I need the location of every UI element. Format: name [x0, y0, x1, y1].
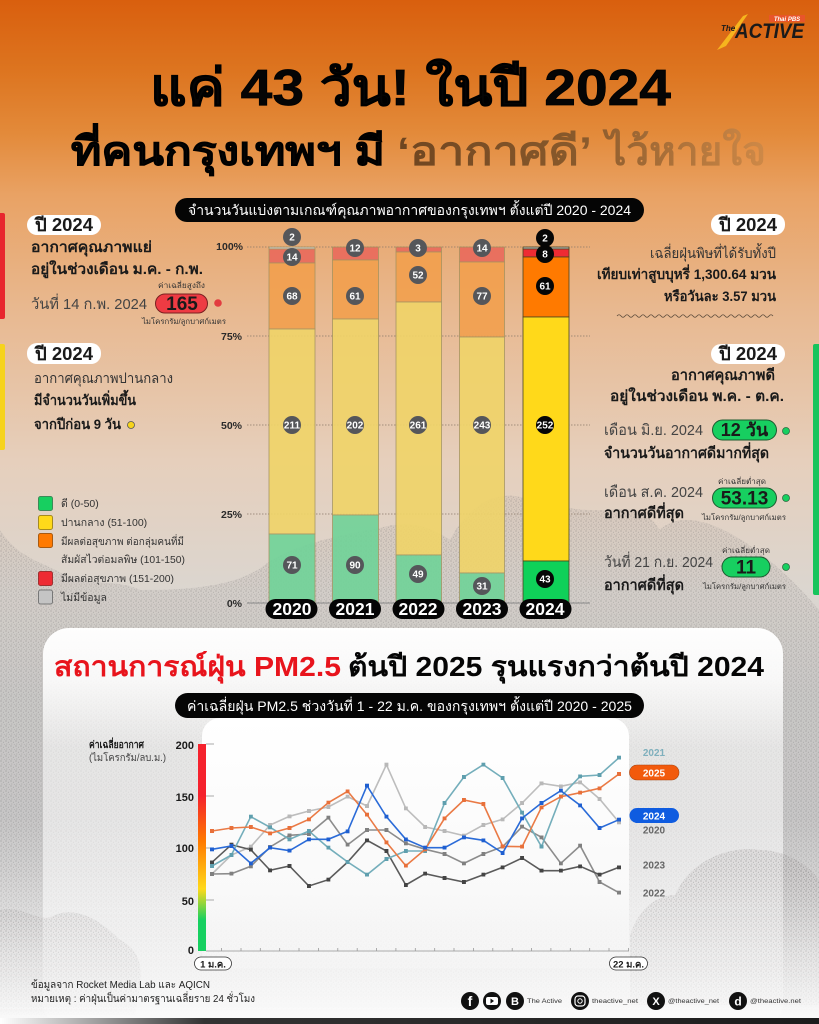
- icon: x: X: [652, 996, 660, 1008]
- value bubbles: 52: [412, 270, 424, 282]
- line 2022: [212, 818, 619, 893]
- callout: good air 2024: ไมโครกรัม/ลูกบาศก์เมตร: [701, 513, 786, 522]
- icon: tiktok: d: [734, 994, 742, 1008]
- bar 2024: [523, 247, 569, 603]
- value bubbles: 90: [349, 560, 361, 572]
- series labels: [630, 748, 679, 900]
- callout: moderate air 2024: ปี 2024: [34, 344, 93, 364]
- callout: bad air 2024: [27, 215, 226, 326]
- series labels: 2022: [643, 888, 666, 900]
- icon: blockdit: [506, 992, 524, 1010]
- callout: good air 2024: อยู่ในช่วงเดือน พ.ค. - ต.ค.: [610, 387, 784, 406]
- value bubbles: 68: [286, 292, 298, 302]
- callout: good air 2024: 53.13: [721, 488, 768, 510]
- icon: blockdit: B: [511, 996, 519, 1008]
- callout: bad air 2024: ไมโครกรัม/ลูกบาศก์เมตร: [141, 317, 226, 326]
- axis labels and grid: 50%: [221, 420, 243, 432]
- y axis title: [89, 737, 166, 764]
- chart title pill: จำนวนวันแบ่งตามเกณฑ์คุณภาพอากาศของกรุงเทพฯ ตั้งแต่ปี 2020 - 2024: [188, 200, 631, 219]
- icon: tiktok: [729, 992, 747, 1010]
- series labels: 2021: [643, 748, 666, 759]
- callout: good air 2024: เดือน มิ.ย. 2024: [604, 422, 703, 439]
- source note: [31, 979, 255, 1005]
- legend: ปานกลาง (51-100): [61, 517, 147, 529]
- title: แค่ 43 วัน! ในปี 2024: [150, 58, 672, 116]
- value bubbles: 31: [476, 582, 488, 592]
- cloud bottom right: [630, 849, 819, 1005]
- axes: [206, 744, 629, 951]
- value bubbles: 43: [539, 574, 551, 586]
- line chart: PM2.5: [89, 737, 679, 970]
- series labels: 2025: [643, 768, 666, 780]
- year pills: 2022: [399, 599, 438, 619]
- icon: facebook: [461, 992, 479, 1010]
- year pills: [266, 599, 572, 619]
- logo: The Active: ACTIVE: [734, 20, 805, 43]
- callout: good air 2024: เดือน ส.ค. 2024: [604, 484, 703, 501]
- callout: good air 2024: ปี 2024: [718, 344, 777, 364]
- panel heading: ต้นปี 2025 รุนแรงกว่าต้นปี 2024: [348, 651, 764, 684]
- social icons: [461, 992, 801, 1010]
- social icons: theactive_net: [592, 998, 638, 1005]
- line 2021: [212, 758, 619, 875]
- year pills: 2024: [526, 599, 565, 619]
- value bubbles: 14: [476, 244, 488, 254]
- legend: มีผลต่อสุขภาพ ต่อกลุ่มคนที่มี: [61, 534, 184, 548]
- year pills: 2020: [273, 599, 312, 619]
- value bubbles: 12: [349, 244, 361, 254]
- bar 2021: [332, 247, 378, 603]
- callout: bad air 2024: ปี 2024: [34, 215, 93, 235]
- y axis values: [176, 740, 194, 957]
- bar 2022: [396, 247, 442, 603]
- title: ที่คนกรุงเทพฯ มี: [71, 123, 385, 177]
- series labels: 2020: [643, 826, 666, 836]
- callout: good air 2024: ค่าเฉลี่ยต่ำสุด: [718, 476, 766, 486]
- icon: youtube: [483, 992, 501, 1010]
- social icons: @theactive.net: [750, 998, 801, 1005]
- callout: cigarettes equivalent: ปี 2024: [718, 215, 777, 235]
- title: [71, 58, 766, 177]
- stacked bar chart: air quality days: [216, 228, 590, 619]
- value bubbles: 261: [410, 420, 427, 432]
- axis labels and grid: 0%: [227, 598, 243, 610]
- line chart subtitle pill: [175, 693, 644, 718]
- callout: bad air 2024: 165: [166, 294, 198, 315]
- chart title pill: [175, 198, 644, 222]
- legend: มีผลต่อสุขภาพ (151-200): [61, 572, 174, 585]
- logo: The Active: Thai PBS: [774, 17, 800, 23]
- axis labels and grid: 75%: [221, 331, 243, 343]
- axis labels and grid: 25%: [221, 509, 243, 521]
- icon: x: [647, 992, 665, 1010]
- callout: good air 2024: ค่าเฉลี่ยต่ำสุด: [722, 545, 770, 555]
- y axis values: 150: [176, 792, 194, 804]
- value bubbles: 3: [415, 244, 421, 254]
- line 2020: [212, 765, 619, 874]
- logo: The Active: The: [721, 24, 736, 33]
- legend: สัมผัสไวต่อมลพิษ (101-150): [61, 553, 185, 566]
- callout: cigarettes equivalent: หรือวันละ 3.57 มวน: [664, 288, 776, 304]
- social icons: The Active: [527, 998, 562, 1005]
- callout: bad air 2024: อยู่ในช่วงเดือน ม.ค. - ก.พ.: [31, 260, 203, 279]
- value bubbles: 8: [542, 250, 548, 260]
- year pills: 2023: [463, 599, 502, 619]
- value bubbles: 2: [542, 234, 548, 244]
- x axis pills: [194, 957, 648, 970]
- callout: moderate air 2024: [27, 343, 173, 432]
- value bubbles: 77: [476, 292, 488, 302]
- y axis title: (ไมโครกรัม/ลบ.ม.): [89, 751, 166, 764]
- callout: cigarettes equivalent: เทียบเท่าสูบบุหรี่ 1,300.64 มวน: [597, 264, 776, 283]
- colour scale bar: [198, 744, 206, 951]
- icon: facebook: f: [468, 993, 473, 1009]
- value bubbles: 252: [537, 420, 554, 432]
- source note: หมายเหตุ : ค่าฝุ่นเป็นค่ามาตรฐานเฉลี่ยราย 24 ชั่วโมง: [31, 991, 255, 1005]
- callout: cigarettes equivalent: เฉลี่ยฝุ่นพิษที่ได้รับทั้งปี: [650, 243, 776, 262]
- axis labels and grid: [216, 241, 590, 610]
- year pills: 2021: [336, 599, 375, 619]
- callout: bad air 2024: วันที่ 14 ก.พ. 2024: [31, 293, 147, 313]
- callout: good air 2024: 11: [736, 558, 756, 578]
- value bubbles: 49: [412, 570, 424, 580]
- value bubbles: 2: [289, 232, 295, 244]
- x axis pills: 22 ม.ค.: [613, 960, 644, 970]
- value bubbles: 71: [286, 560, 298, 572]
- line chart subtitle pill: ค่าเฉลี่ยฝุ่น PM2.5 ช่วงวันที่ 1 - 22 ม.ค. ของกรุงเทพฯ ตั้งแต่ปี 2020 - 2025: [187, 696, 632, 715]
- cloud band behind charts: [0, 496, 819, 1024]
- bar 2020: [269, 247, 315, 603]
- callout: good air 2024: 12 วัน: [721, 420, 769, 440]
- icon: instagram: [571, 992, 589, 1010]
- callout: good air 2024: อากาศคุณภาพดี: [671, 367, 775, 385]
- callout: good air 2024: วันที่ 21 ก.ย. 2024: [604, 551, 713, 571]
- y axis values: 100: [176, 843, 194, 855]
- x axis pills: 1 ม.ค.: [200, 960, 226, 970]
- value bubbles: 61: [349, 292, 361, 302]
- callout: good air 2024: [604, 344, 790, 595]
- value bubbles: [283, 228, 554, 595]
- bar 2023: [460, 247, 504, 603]
- source note: ข้อมูลจาก Rocket Media Lab และ AQICN: [31, 979, 210, 991]
- y axis title: ค่าเฉลี่ยอากาศ: [89, 737, 145, 751]
- title: ‘อากาศดี’: [397, 130, 592, 174]
- legend: ไม่มีข้อมูล: [60, 591, 107, 604]
- callout: good air 2024: อากาศดีที่สุด: [604, 574, 684, 595]
- value bubbles: 243: [474, 420, 491, 432]
- legend: ดี (0-50): [61, 497, 99, 510]
- callout: moderate air 2024: มีจำนวนวันเพิ่มขึ้น: [34, 389, 136, 408]
- side colour bars: [0, 213, 819, 595]
- legend: [38, 496, 185, 604]
- value bubbles: 211: [284, 420, 301, 432]
- title: ไว้หายใจ: [602, 128, 766, 174]
- panel heading: [54, 651, 764, 684]
- value bubbles: 202: [347, 420, 364, 432]
- callout: bad air 2024: ค่าเฉลี่ยสูงถึง: [158, 280, 205, 290]
- axis labels and grid: 100%: [216, 241, 244, 253]
- social icons: @theactive_net: [668, 998, 719, 1005]
- series labels: 2023: [643, 860, 666, 872]
- callout: good air 2024: จำนวนวันอากาศดีมากที่สุด: [604, 442, 769, 463]
- line 2024: [212, 786, 619, 863]
- callout: moderate air 2024: อากาศคุณภาพปานกลาง: [34, 370, 173, 387]
- callout: good air 2024: อากาศดีที่สุด: [604, 502, 684, 523]
- bottom dark strip: [0, 1018, 819, 1024]
- value bubbles: 14: [286, 252, 298, 264]
- y axis values: 50: [182, 896, 194, 908]
- y axis values: 200: [176, 740, 194, 752]
- callout: cigarettes equivalent: [597, 214, 785, 317]
- line 2025: [212, 774, 619, 866]
- callout: bad air 2024: อากาศคุณภาพแย่: [31, 239, 152, 257]
- cloud bottom left: [0, 909, 141, 1015]
- callout: moderate air 2024: จากปีก่อน 9 วัน: [34, 416, 121, 432]
- value bubbles: 61: [539, 282, 551, 292]
- callout: good air 2024: ไมโครกรัม/ลูกบาศก์เมตร: [702, 582, 786, 591]
- line 2023: [212, 840, 619, 886]
- y axis values: 0: [188, 945, 194, 957]
- series labels: 2024: [643, 812, 666, 822]
- white lower panel: [43, 628, 783, 1024]
- logo: The Active: [717, 14, 805, 50]
- line chart card: [202, 718, 629, 968]
- panel heading: สถานการณ์ฝุ่น PM2.5: [54, 651, 341, 684]
